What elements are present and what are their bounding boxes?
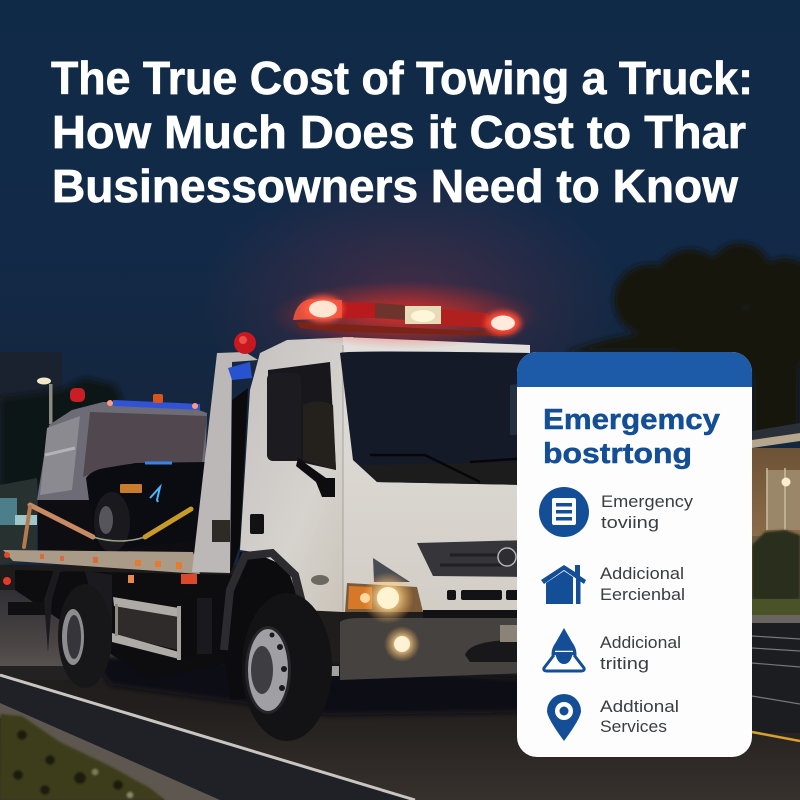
icon: house [541, 565, 586, 604]
shadow under truck [90, 655, 540, 715]
fog light [384, 626, 420, 662]
front wheel arch [222, 552, 336, 700]
grille [417, 540, 530, 577]
curb and grass [0, 703, 220, 800]
headlight [345, 572, 423, 624]
lamps [303, 296, 343, 322]
title [51, 52, 753, 212]
asphalt strip below road line [0, 677, 415, 800]
list item: additional services: Services [600, 718, 667, 736]
list item: additional triting [544, 628, 681, 673]
door handle [250, 514, 264, 534]
door emblem [311, 575, 329, 585]
background: trees on the right [565, 243, 800, 442]
panel: emergency costing card [517, 352, 752, 757]
chassis [15, 570, 240, 680]
rear fender [44, 566, 112, 652]
card heading [543, 404, 720, 470]
light bar [270, 281, 540, 349]
background: road and pavement [0, 565, 800, 800]
card body [517, 352, 752, 757]
list item: emergency towing: Emergency [601, 493, 694, 511]
card header band [517, 352, 752, 387]
icon: carried vehicle beacons [70, 388, 198, 409]
icon: drop on triangle [544, 628, 584, 671]
list item: additional eercienbal [541, 565, 685, 604]
list item: emergency towing: toviing [601, 514, 659, 532]
list item: additional services: Addtional [600, 698, 679, 716]
icon: cab roof beacon [234, 332, 256, 354]
truck cab front [305, 337, 530, 680]
tie-down straps [24, 505, 191, 547]
background: buildings and trees on the left [0, 352, 122, 565]
flatbed deck [3, 550, 200, 585]
road line [0, 675, 415, 800]
card heading: Emergemcy [543, 404, 720, 436]
icon: document circle [539, 487, 589, 537]
carried vehicle [37, 388, 207, 553]
background: house on the right [752, 423, 800, 615]
tow truck [3, 281, 540, 741]
list item: additional eercienbal: Addicional [600, 565, 684, 583]
front wheel [242, 593, 332, 741]
side guard rail [112, 597, 212, 660]
icon: side mirror [267, 373, 335, 497]
title: How Much Does it Cost to Thar [52, 106, 746, 158]
list item: additional services [547, 694, 679, 741]
headboard [192, 352, 258, 575]
wipers [370, 455, 530, 482]
bumper [305, 610, 530, 680]
rear wheel [58, 584, 112, 688]
truck cab side and door [240, 337, 353, 612]
lower vents [447, 590, 530, 600]
windshield [340, 352, 530, 485]
icon: location pin [547, 694, 581, 741]
list item: additional triting: Addicional [600, 634, 681, 652]
list item: emergency towing [539, 487, 694, 537]
card heading: bostrtong [543, 438, 692, 470]
title: Businessowners Need to Know [52, 160, 738, 212]
door window [268, 362, 336, 470]
title: The True Cost of Towing a Truck: [51, 52, 753, 104]
list item: additional eercienbal: Eercienbal [600, 586, 685, 604]
list item: additional triting: triting [600, 655, 649, 673]
